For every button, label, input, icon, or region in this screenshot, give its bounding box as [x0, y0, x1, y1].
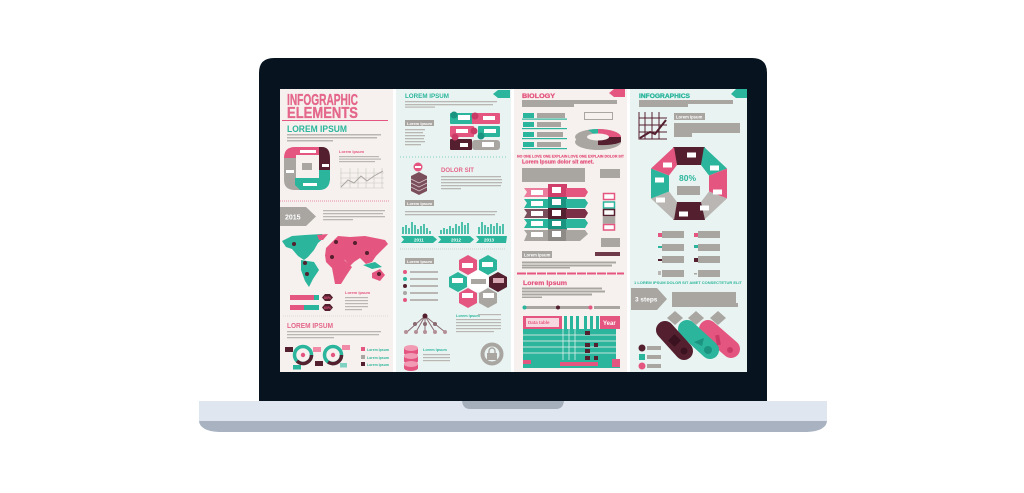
- gray text: [522, 262, 616, 268]
- gray diamonds: [667, 311, 726, 325]
- year arrow band: [401, 236, 507, 243]
- legend: Lorem Ipsum: [367, 348, 389, 352]
- label: lorem ipsum: Lorem Ipsum: [423, 348, 447, 352]
- list text: [405, 129, 425, 145]
- teal text line: 1 LOREM IPSUM DOLOR SIT AMET CONSECTETUR ELIT: [634, 281, 743, 285]
- gray block: [522, 168, 585, 182]
- year arrow: 2015: [285, 214, 301, 222]
- year arrow band: 2013: [484, 238, 495, 242]
- cylinder text: [423, 354, 450, 361]
- heading: lorem ipsum: LOREM IPSUM: [287, 323, 333, 330]
- 3D ribbon chart: [524, 184, 588, 241]
- bullet list: [403, 270, 438, 302]
- cylinder stack: [404, 345, 418, 371]
- 3D donut chart: [575, 129, 621, 150]
- title: ELEMENTS: [287, 105, 358, 122]
- heading: INFOGRAPHICS: [639, 93, 691, 100]
- intro text: [405, 101, 497, 108]
- panel: octagon column: [630, 89, 747, 372]
- gray block: [672, 292, 736, 303]
- stacked tower icon: [411, 162, 427, 195]
- year text: [323, 210, 385, 220]
- line chart: [340, 168, 384, 188]
- stat rows: [522, 113, 567, 149]
- small legend: [638, 344, 661, 370]
- divider: [280, 200, 390, 202]
- label box: [522, 251, 552, 258]
- bar chart: [402, 222, 504, 234]
- tag: [493, 90, 510, 98]
- label: lorem ipsum: Lorem Ipsum: [456, 314, 480, 318]
- gray block side: [600, 169, 620, 178]
- title: [287, 92, 358, 122]
- square ring diagram: [284, 147, 330, 190]
- intro block: [639, 100, 733, 104]
- section text: [441, 176, 502, 189]
- divider: [400, 156, 506, 158]
- map text: [345, 297, 368, 310]
- screen: [280, 89, 747, 372]
- gray block: [674, 123, 740, 133]
- intro block end: [522, 104, 574, 107]
- laptop base: [199, 401, 827, 432]
- legend: Lorem Ipsum: [367, 356, 389, 360]
- panel: lorem ipsum and dolor sit: [396, 89, 511, 372]
- speech block grid: [450, 112, 500, 150]
- donut charts: [285, 345, 350, 370]
- pink dashed line: [517, 272, 624, 274]
- octagon value: 80%: [679, 173, 696, 183]
- octagon chart: [651, 147, 727, 220]
- gray arrow: [631, 288, 667, 310]
- lock icon: [482, 344, 502, 364]
- title: INFOGRAPHIC: [287, 92, 358, 109]
- octagon text: [677, 186, 700, 195]
- side keys: [604, 194, 614, 230]
- gray text: [522, 288, 605, 298]
- heading: lorem ipsum: LOREM IPSUM: [287, 124, 347, 134]
- outlined box: [584, 112, 612, 120]
- maroon bar: [595, 252, 620, 256]
- label box: Lorem Ipsum: [676, 114, 703, 120]
- gray side block: [601, 238, 620, 247]
- laptop: [199, 58, 827, 432]
- divider: [283, 315, 388, 317]
- legend: [361, 347, 389, 367]
- body text: [339, 156, 381, 162]
- tree diagram: [404, 314, 447, 334]
- heading: BIOLOGY: [522, 93, 556, 100]
- label: lorem ipsum: Lorem Ipsum: [345, 290, 371, 295]
- label box: Lorem Ipsum: [524, 252, 551, 257]
- tag: [731, 89, 747, 98]
- gray block end: [674, 133, 692, 137]
- gray arrow: 3 steps: [635, 296, 658, 304]
- laptop bezel: [259, 58, 767, 401]
- panel: report column: [514, 89, 627, 372]
- intro block: [522, 100, 617, 104]
- gray block end: [672, 303, 738, 307]
- panel: infographic elements: [280, 89, 393, 372]
- pink subheading: Lorem Ipsum dolor sit amet.: [522, 160, 595, 166]
- label: lorem ipsum: Lorem Ipsum: [339, 149, 365, 154]
- people chart: 80%: [324, 296, 332, 300]
- grid chart: [639, 112, 667, 139]
- year arrow: [280, 207, 316, 226]
- legend: Lorem Ipsum: [367, 363, 389, 367]
- pink text line: NO ONE LOVE ONE EXPLAIN LOVE ONE EXPLAIN DOLOR SIT: [517, 154, 624, 158]
- label box: [674, 113, 705, 120]
- label box: Lorem Ipsum: [407, 201, 433, 206]
- legend grid: [658, 231, 720, 277]
- data table: Year: [603, 321, 616, 327]
- year arrow band: 2011: [414, 238, 424, 242]
- year arrow band: 2012: [451, 238, 462, 242]
- section text: [405, 211, 497, 215]
- tree text: [456, 314, 501, 332]
- intro block end: [639, 104, 688, 107]
- people chart: 60%: [324, 306, 332, 310]
- heading: dolor sit: DOLOR SIT: [441, 167, 474, 174]
- timeline: [522, 306, 620, 310]
- section text: [287, 331, 381, 338]
- tag: [609, 89, 625, 97]
- label box: Lorem Ipsum: [407, 259, 433, 264]
- divider: [400, 248, 506, 250]
- heading: lorem ipsum: LOREM IPSUM: [405, 93, 449, 100]
- world map: [282, 234, 388, 287]
- diagonal pills: [665, 329, 733, 354]
- label box: Lorem Ipsum: [407, 121, 433, 126]
- people chart: [290, 294, 333, 311]
- intro text: [287, 134, 381, 142]
- pink heading: Lorem Ipsum: [523, 280, 567, 287]
- data table: Data table: [528, 320, 550, 325]
- hexagon cluster: [449, 255, 507, 308]
- data table: [523, 316, 620, 368]
